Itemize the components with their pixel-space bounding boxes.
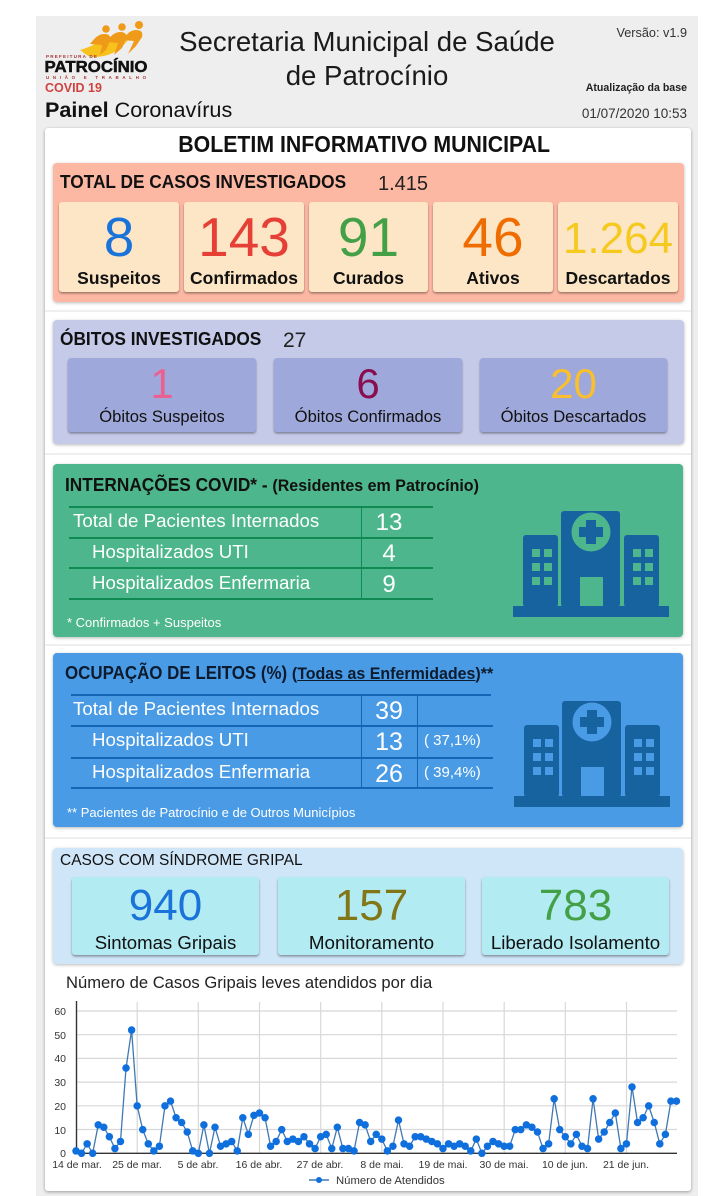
tile: óbitos confirmados [274, 358, 462, 432]
table: leitos: 26 [375, 760, 403, 788]
line chart: número de atendidos: 16 de abr. [236, 1159, 282, 1171]
panel name: Painel Coronavírus [45, 97, 232, 122]
tile: suspeitos: 8 [104, 206, 134, 268]
panel heading: INTERNAÇÕES COVID* - (Residentes em Patrocínio) [65, 475, 479, 495]
tile: sintomas gripais: 940 [129, 881, 202, 930]
tile: óbitos suspeitos: 1 [150, 360, 174, 407]
tile: óbitos confirmados: 6 [356, 360, 380, 407]
tile: sintomas gripais [72, 877, 259, 955]
panel heading: CASOS COM SÍNDROME GRIPAL [60, 852, 303, 869]
footnote: ** Pacientes de Patrocínio e de Outros Municípios [67, 805, 355, 820]
line chart: número de atendidos: 21 de jun. [603, 1159, 649, 1171]
update label: Atualização da base [586, 82, 687, 94]
tile: liberado isolamento: 783 [539, 881, 612, 930]
tile: monitoramento [278, 877, 465, 955]
tile: monitoramento: Monitoramento [309, 932, 434, 953]
tile: monitoramento: 157 [335, 881, 408, 930]
tile: curados [309, 202, 428, 292]
table: internações: 9 [382, 571, 396, 598]
line chart: número de atendidos: 19 de mai. [418, 1159, 468, 1171]
tile: descartados [558, 202, 678, 292]
line chart: número de atendidos: 40 [54, 1053, 66, 1065]
table: leitos: Total de Pacientes Internados [73, 698, 319, 719]
tile: confirmados: 143 [198, 206, 290, 268]
icon: hospital [514, 701, 670, 807]
line chart: número de atendidos: 5 de abr. [178, 1159, 218, 1171]
white bulletin card [45, 128, 691, 1191]
tile: óbitos descartados [480, 358, 667, 432]
tile: confirmados [184, 202, 304, 292]
table: leitos: Hospitalizados Enfermaria [92, 761, 310, 782]
table: leitos: 39 [375, 697, 403, 725]
line chart: número de atendidos: 30 de mai. [479, 1159, 529, 1171]
tile: descartados: 1.264 [563, 214, 673, 263]
version: Versão: v1.9 [616, 26, 687, 40]
tile: óbitos descartados: Óbitos Descartados [501, 407, 646, 426]
tile: curados: 91 [338, 206, 399, 268]
line chart: número de atendidos: 27 de abr. [297, 1159, 343, 1171]
tile: liberado isolamento: Liberado Isolamento [491, 932, 660, 953]
line chart: número de atendidos: 8 de mai. [360, 1159, 404, 1171]
line chart: número de atendidos: Número de Atendidos [336, 1175, 445, 1187]
panel: total de casos investigados [53, 163, 684, 302]
tile: ativos [433, 202, 553, 292]
main title: Secretaria Municipal de Saúde [179, 26, 555, 57]
panel heading: ÓBITOS INVESTIGADOS [60, 329, 261, 349]
table: internações: 13 [376, 509, 402, 536]
table: leitos [71, 694, 493, 789]
panel: óbitos investigados [53, 320, 684, 444]
line chart: número de atendidos: 0 [60, 1148, 66, 1160]
logo: Prefeitura de Patrocínio: UNIÃO E TRABALHO [46, 75, 147, 80]
table: internações: Hospitalizados UTI [92, 541, 249, 562]
tile: suspeitos [59, 202, 179, 292]
line chart: número de atendidos: 25 de mar. [112, 1159, 162, 1171]
panel heading: OCUPAÇÃO DE LEITOS (%) (Todas as Enfermidades)** [65, 663, 493, 683]
tile: óbitos descartados: 20 [550, 360, 597, 407]
update date: 01/07/2020 10:53 [582, 106, 687, 121]
panel heading: TOTAL DE CASOS INVESTIGADOS [60, 172, 346, 192]
table: leitos: 13 [375, 728, 403, 756]
logo: Prefeitura de Patrocínio [44, 21, 148, 80]
icon: hospital [513, 511, 669, 617]
tile: sintomas gripais: Sintomas Gripais [95, 932, 236, 953]
tile: ativos: Ativos [466, 268, 520, 288]
bulletin heading: BOLETIM INFORMATIVO MUNICIPAL [178, 131, 550, 157]
panel: casos com síndrome gripal [53, 848, 683, 964]
line chart: número de atendidos: 30 [54, 1077, 66, 1089]
tile: descartados: Descartados [565, 268, 671, 288]
line chart: número de atendidos: 10 [54, 1125, 66, 1137]
logo: Prefeitura de Patrocínio: PATROCÍNIO [44, 57, 148, 76]
tile: óbitos suspeitos [68, 358, 256, 432]
table: internações: Total de Pacientes Internados [73, 510, 319, 531]
panel: internações covid [53, 464, 683, 637]
total number: 1.415 [378, 173, 428, 195]
line chart: número de atendidos [52, 1001, 680, 1187]
table: leitos: ( 39,4%) [424, 764, 481, 781]
table: internações [69, 506, 433, 600]
logo: Prefeitura de Patrocínio: PREFEITURA DE [46, 54, 97, 59]
table: internações: 4 [382, 540, 396, 567]
line chart: número de atendidos: 10 de jun. [542, 1159, 588, 1171]
tile: curados: Curados [333, 268, 404, 288]
total number: 27 [283, 329, 306, 352]
main title [179, 26, 555, 90]
covid 19 label: COVID 19 [45, 81, 102, 95]
line chart: número de atendidos: 50 [54, 1030, 66, 1042]
line chart: número de atendidos: 14 de mar. [52, 1159, 102, 1171]
table: internações: Hospitalizados Enfermaria [92, 572, 310, 593]
tile: ativos: 46 [462, 206, 524, 268]
tile: liberado isolamento [482, 877, 669, 955]
line chart: número de atendidos: 60 [54, 1006, 66, 1018]
tile: óbitos confirmados: Óbitos Confirmados [295, 407, 441, 426]
tile: confirmados: Confirmados [190, 268, 298, 288]
line chart: número de atendidos: 20 [54, 1101, 66, 1113]
footnote: * Confirmados + Suspeitos [67, 615, 221, 630]
tile: óbitos suspeitos: Óbitos Suspeitos [99, 407, 225, 426]
chart title: Número de Casos Gripais leves atendidos por dia [66, 973, 432, 992]
tile: suspeitos: Suspeitos [77, 268, 161, 288]
main title: de Patrocínio [286, 60, 448, 90]
panel: ocupação de leitos [53, 653, 683, 827]
table: leitos: ( 37,1%) [424, 732, 481, 749]
table: leitos: Hospitalizados UTI [92, 729, 249, 750]
